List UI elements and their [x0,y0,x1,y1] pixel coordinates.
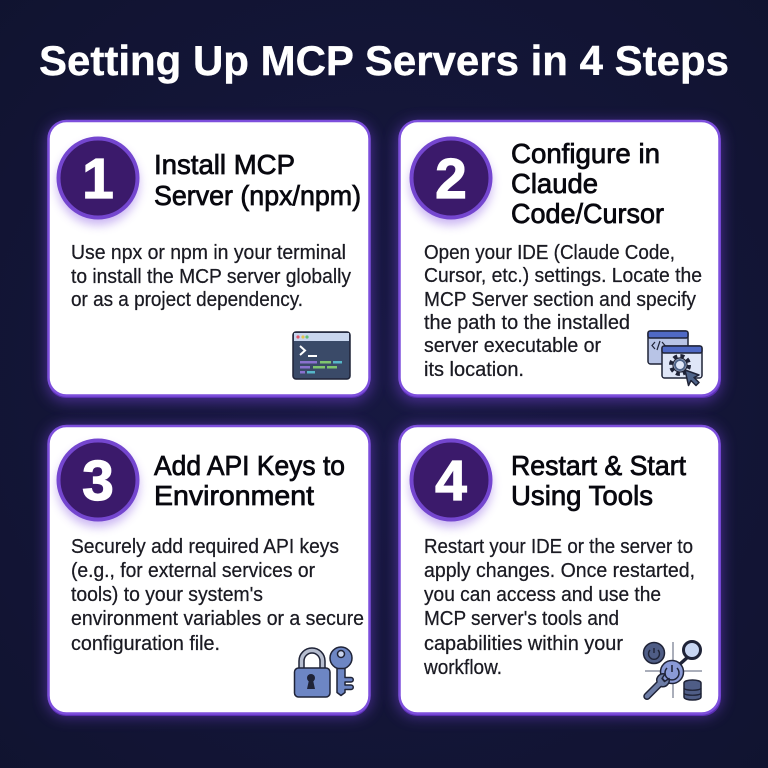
number badge 3: 3 [82,449,114,513]
number badge 2: 2 [435,147,467,211]
panel: step 2 [396,121,722,402]
panel: step 4 [396,425,722,717]
body text: (e.g., for external services or [71,560,315,582]
body text [71,242,351,311]
body text: its location. [424,359,524,381]
body text: Use npx or npm in your terminal [71,242,346,264]
body text [423,536,695,679]
body text: workflow. [423,657,502,679]
heading: Environment [154,480,314,511]
body text: apply changes. Once restarted, [424,560,695,582]
body text: Securely add required API keys [71,536,339,558]
number badge 4: 4 [435,449,467,513]
heading: Claude [511,168,598,199]
heading: Using Tools [511,480,653,511]
card background [48,121,370,396]
heading [154,149,361,211]
body text: you can access and use the [424,584,661,606]
heading [511,450,686,511]
body text: or as a project dependency. [71,289,303,311]
icon: padlock and key [294,647,353,697]
body text: the path to the installed [424,312,630,334]
heading: Code/Cursor [511,198,664,229]
number badge 3 [58,440,138,520]
body text: Restart your IDE or the server to [424,536,693,558]
heading: Add API Keys to [154,450,345,481]
panel: step 1 [46,121,372,402]
icon: power, search, wrench and database [644,642,702,700]
number badge 2 [412,138,490,218]
heading: Configure in [511,138,660,169]
number badge 1: 1 [82,147,114,211]
title: Setting Up MCP Servers in 4 Steps [39,37,729,84]
body text: MCP server's tools and [424,608,619,630]
body text: environment variables or a secure [71,608,364,630]
card background [400,426,720,714]
body text: to install the MCP server globally [71,266,351,288]
heading: Server (npx/npm) [154,180,361,211]
heading [154,450,345,511]
heading: Install MCP [154,149,295,180]
number badge 1 [58,138,138,218]
heading [511,138,664,229]
body text: MCP Server section and specify [424,289,696,311]
heading: Restart & Start [511,450,686,481]
body text: capabilities within your [424,633,623,655]
body text: Open your IDE (Claude Code, [424,242,675,264]
body text: server executable or [424,335,601,357]
body text: configuration file. [71,633,220,655]
panel: step 3 [46,425,372,717]
body text [71,536,364,655]
number badge 4 [412,440,490,520]
body text: tools) to your system's [71,584,263,606]
body text [424,242,702,381]
icon: configuration windows [648,331,702,386]
card background [400,121,720,396]
card background [48,426,370,714]
icon: terminal window [293,332,350,379]
body text: Cursor, etc.) settings. Locate the [424,265,702,287]
